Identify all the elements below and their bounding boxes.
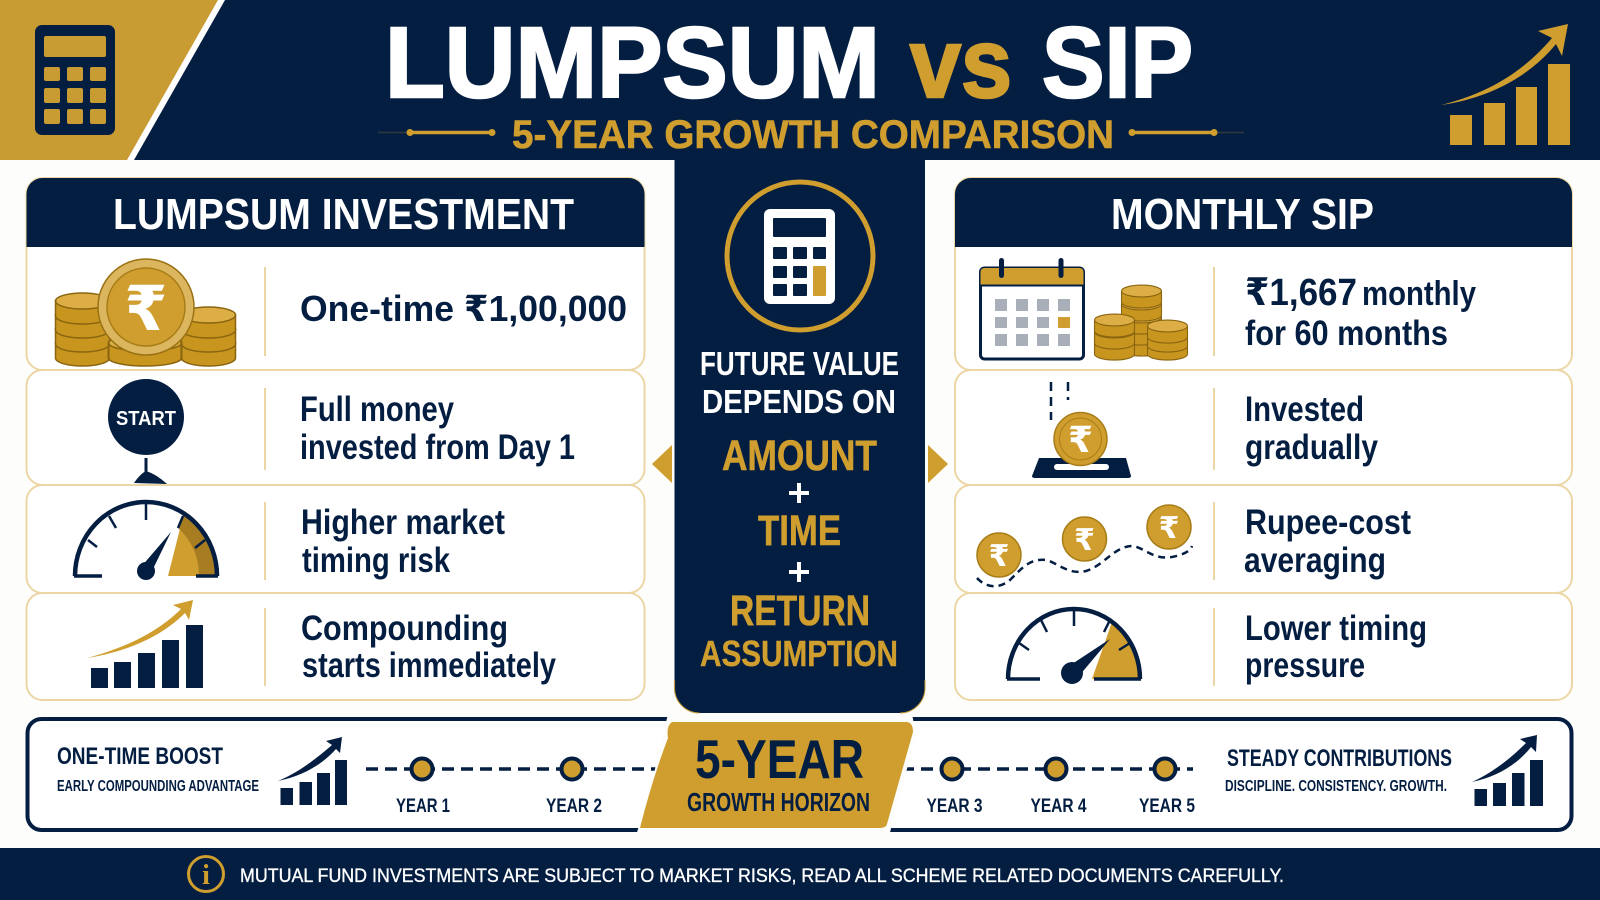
row: full money invested: invested from Day 1 [300,428,575,467]
icon: header growth chart [1441,24,1570,145]
text: formula: ASSUMPTION [700,633,898,674]
title: SIP [1042,7,1193,119]
text: steady contributions: STEADY CONTRIBUTIONS [1227,745,1452,772]
text: steady contributions: DISCIPLINE. CONSISTENCY. GROWTH. [1225,778,1447,795]
row: rupee-cost averaging: Rupee-cost [1245,503,1411,542]
title: vs [910,8,1012,118]
timeline: years 1-2 [366,758,660,817]
icon: left growth chart [278,737,347,805]
heading: monthly sip [955,178,1572,247]
heading: lumpsum [26,178,644,247]
icon: coins on wavy path: ₹ [1159,512,1179,545]
arrow: right [928,445,948,483]
icon: right growth chart [1472,735,1543,806]
timeline: years 1-2: YEAR 2 [546,796,602,817]
text: one-time boost: EARLY COMPOUNDING ADVANTAGE [57,778,259,795]
icon: coin into slot [1032,382,1131,478]
panel: monthly sip [955,178,1572,700]
row: lower timing pressure: Lower timing [1245,609,1427,648]
row: one-time amount: One-time ₹1,00,000 [300,288,627,329]
icon: low risk gauge [1007,609,1141,684]
panel: lumpsum investment [26,178,644,700]
text: future value depends on: DEPENDS ON [702,383,896,420]
timeline: years 3-5: YEAR 5 [1139,796,1195,817]
row: compounding: starts immediately [302,646,556,685]
icon: coins on wavy path [977,505,1192,586]
badge: 5-year growth horizon: 5-YEAR [695,728,864,790]
timeline: years 3-5: YEAR 3 [926,796,982,817]
icon: high risk gauge [74,502,218,580]
row: market timing risk: Higher market [301,503,505,542]
icon: growth bars [87,600,203,688]
text: future value depends on: FUTURE VALUE [700,345,899,382]
row: full money invested [26,370,644,485]
icon: calendar and coins [980,258,1187,360]
row: rupee-cost averaging: averaging [1244,541,1386,580]
subtitle: 5-YEAR GROWTH COMPARISON [512,113,1114,157]
row: full money invested: Full money [300,390,454,429]
text: steady contributions [1225,745,1452,795]
title: LUMPSUM [385,7,880,119]
icon: coin stack [56,259,236,366]
icon: header calculator [35,25,115,135]
heading: monthly sip: MONTHLY SIP [1111,190,1374,239]
text: formula [700,432,898,674]
text: formula: TIME [758,507,841,555]
icon: start pin: START [116,408,176,430]
icon: coin stack: ₹ [124,275,168,344]
icon: coin into slot: ₹ [1068,419,1093,460]
row: one-time amount [56,259,627,366]
row: invested gradually [955,370,1572,485]
text: one-time boost [57,743,259,795]
row: monthly amount: monthly [1362,275,1476,313]
row: market timing risk [26,485,644,593]
badge: 5-year growth horizon: GROWTH HORIZON [687,787,870,817]
badge: 5-year growth horizon [636,714,916,836]
row: rupee-cost averaging [955,485,1572,593]
row: market timing risk: timing risk [302,541,450,580]
row: compounding: Compounding [301,609,508,648]
text: formula: RETURN [730,587,870,635]
text: one-time boost: ONE-TIME BOOST [57,743,223,770]
row: monthly amount: for 60 months [1245,314,1448,353]
arrow: left [652,445,672,483]
row: lower timing pressure [955,593,1572,700]
icon: coins on wavy path: ₹ [989,540,1009,573]
timeline: years 3-5: YEAR 4 [1030,796,1087,817]
header banner [0,0,1600,160]
row: invested gradually: gradually [1245,428,1378,467]
panel: centre formula [674,160,925,713]
row: invested gradually: Invested [1245,390,1364,429]
panel: growth horizon strip [28,719,1572,830]
timeline: years 1-2: YEAR 1 [396,796,450,817]
row: monthly amount [980,258,1476,360]
text: formula: AMOUNT [722,432,877,480]
title [385,7,1193,119]
row: monthly amount: ₹1,667 [1245,272,1357,314]
row: lower timing pressure: pressure [1245,646,1365,685]
text: future value depends on [700,345,899,420]
footer disclaimer [0,848,1600,900]
icon: info: i [202,860,210,891]
icon: coins on wavy path: ₹ [1074,524,1095,557]
row: compounding [26,593,644,700]
heading: lumpsum: LUMPSUM INVESTMENT [113,190,574,239]
icon: centre calculator [727,182,873,330]
timeline: years 3-5 [902,758,1195,817]
footer disclaimer: MUTUAL FUND INVESTMENTS ARE SUBJECT TO MARKET RISKS, READ ALL SCHEME RELATED DOCUMENTS CAREFULLY. [240,866,1284,887]
icon: info [188,856,224,892]
icon: start pin [108,379,184,484]
